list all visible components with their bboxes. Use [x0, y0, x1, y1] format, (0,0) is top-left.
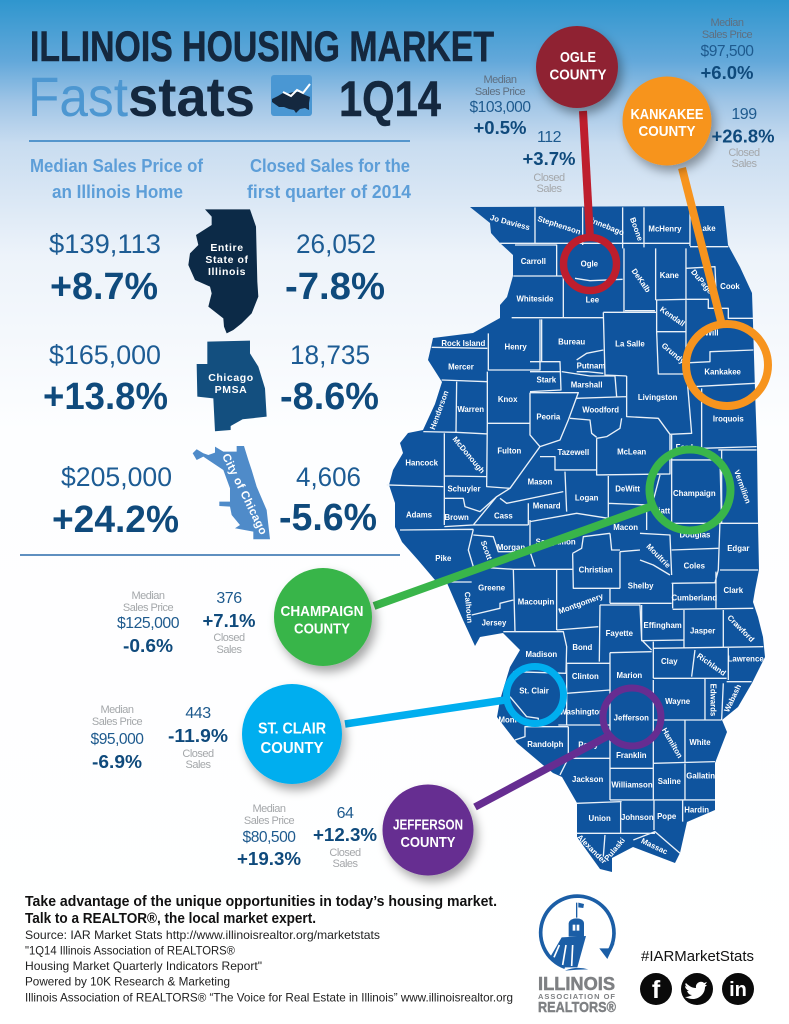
Jefferson price stats: $80,500 — [242, 829, 296, 846]
logo: Illinois Association of Realtors — [538, 896, 616, 1016]
county names north: Stephenson — [536, 214, 582, 237]
Kankakee price stats: Sales Price — [702, 29, 752, 41]
St. Clair price stats: -6.9% — [92, 751, 142, 772]
county names north: Menard — [533, 501, 561, 510]
county names north: Knox — [498, 395, 518, 404]
county names north: Henry — [505, 343, 527, 352]
Ogle price stats: +0.5% — [474, 117, 526, 138]
county names north: Grundy — [660, 341, 687, 366]
county names south: Jackson — [572, 775, 604, 784]
county names north: Schuyler — [447, 485, 481, 494]
county names north: Fulton — [497, 447, 521, 456]
county names south: Fayette — [606, 629, 634, 638]
Champaign price stats: Sales Price — [123, 602, 173, 614]
stats row: entire state: $139,113 — [49, 229, 161, 259]
stats row: Chicago PMSA — [43, 340, 379, 418]
county names south: Douglas — [680, 531, 711, 540]
county names south: Johnson — [621, 813, 654, 822]
sources: "1Q14 Illinois Association of REALTORS® — [25, 944, 235, 958]
Jefferson closed sales stats: 64 — [337, 805, 354, 822]
Champaign closed sales stats: +7.1% — [202, 610, 256, 631]
county names south: Moultrie — [644, 542, 673, 570]
Jefferson price stats — [237, 803, 301, 869]
callout: Kankakee County: KANKAKEE — [630, 106, 704, 123]
county names south: Crawford — [725, 613, 756, 644]
sources: Source: IAR Market Stats http://www.illinoisrealtor.org/marketstats — [25, 928, 380, 942]
Jefferson price stats: Sales Price — [244, 815, 294, 827]
county names south: Macoupin — [518, 598, 554, 607]
Champaign closed sales stats: 376 — [216, 590, 242, 607]
stats row: entire state: +8.7% — [50, 266, 158, 308]
St. Clair closed sales stats: -11.9% — [168, 725, 228, 746]
Faststats logo: Fast — [28, 65, 128, 128]
icon: LinkedIn — [722, 973, 754, 1005]
icon: Facebook: f — [652, 976, 661, 1004]
county names south: St. Clair — [519, 687, 549, 696]
stats row: City of Chicago: -5.6% — [279, 497, 377, 539]
St. Clair price stats: $95,000 — [90, 731, 144, 748]
call to action — [25, 894, 497, 927]
callout: Ogle County — [536, 26, 618, 290]
county names south: Clark — [724, 586, 744, 595]
icon: LinkedIn: in — [729, 979, 747, 1001]
county names north: Putnam — [577, 362, 605, 371]
state outline — [389, 206, 765, 872]
county names south: Pope — [657, 812, 677, 821]
county names south: Effingham — [643, 621, 682, 630]
Faststats logo: stats — [128, 65, 255, 128]
St. Clair price stats: Sales Price — [92, 716, 142, 728]
Kankakee price stats: $97,500 — [700, 43, 754, 60]
county names south — [435, 531, 764, 866]
county names north: McHenry — [648, 224, 682, 233]
county names north: McLean — [617, 447, 646, 456]
Kankakee closed sales stats: Sales — [731, 158, 758, 170]
callout: Champaign County — [274, 450, 730, 666]
county names north: Will — [705, 328, 719, 337]
county names north: Henderson — [428, 389, 451, 431]
Jefferson closed sales stats: Closed — [329, 847, 361, 859]
county names south: Union — [589, 814, 611, 823]
callout: Jefferson County — [382, 688, 661, 876]
county names north: Peoria — [536, 412, 561, 421]
county names north: Champaign — [673, 489, 716, 498]
county names north: DuPage — [689, 268, 715, 296]
Jefferson closed sales stats: Sales — [332, 858, 359, 870]
callout: Kankakee County — [622, 76, 768, 406]
heading: median sales price — [30, 156, 204, 202]
county names south: Randolph — [527, 740, 564, 749]
icon: Illinois silhouette — [188, 209, 258, 333]
county names south: Richland — [695, 651, 728, 678]
stats row: City of Chicago: +24.2% — [52, 499, 179, 541]
county names south: Edwards — [709, 684, 718, 717]
county names south: Williamson — [611, 780, 653, 789]
Ogle price stats: Median — [483, 74, 517, 86]
county names north: Lee — [586, 296, 600, 305]
county names south: Christian — [579, 566, 613, 575]
county names south: Morgan — [497, 543, 525, 552]
county borders south — [400, 520, 763, 857]
county names north: Boone — [628, 216, 645, 243]
county names north: Kendall — [658, 305, 687, 328]
county names north: Macon — [613, 523, 638, 532]
county names south: Clinton — [572, 672, 599, 681]
Champaign price stats: $125,000 — [117, 615, 180, 632]
St. Clair closed sales stats: Closed — [182, 748, 214, 760]
county names south: Calhoun — [463, 591, 474, 624]
county names north: Rock Island — [441, 339, 486, 348]
icon: Illinois silhouette: State of — [205, 254, 249, 266]
county names north: Mercer — [448, 362, 474, 371]
Champaign price stats: Median — [131, 590, 165, 602]
St. Clair price stats: Median — [100, 704, 134, 716]
county names south: Montgomery — [557, 591, 605, 616]
Faststats logo — [28, 65, 312, 128]
county names north: Kankakee — [704, 367, 742, 376]
county names north: Kane — [660, 271, 680, 280]
stats row: Chicago PMSA: +13.8% — [43, 376, 168, 418]
call to action: Take advantage of the unique opportunities in today’s housing market. — [25, 894, 497, 910]
icon: City of Chicago silhouette — [193, 446, 270, 539]
sources — [25, 928, 513, 1004]
icon: Facebook — [640, 973, 672, 1005]
county names south: Bond — [572, 643, 593, 652]
county names south: Cumberland — [671, 593, 717, 602]
county names south: White — [689, 738, 711, 747]
title: ILLINOIS HOUSING MARKET — [30, 23, 494, 71]
county names south: Alexander — [575, 833, 608, 866]
stats row: Chicago PMSA: 18,735 — [290, 340, 370, 370]
county names north: McDonough — [451, 435, 487, 475]
stats row: entire state — [49, 229, 385, 308]
stats row: City of Chicago — [52, 462, 377, 541]
county names north: Cook — [720, 282, 740, 291]
county names south: Washington — [559, 708, 604, 717]
Champaign closed sales stats — [202, 590, 256, 656]
callout: Ogle County: OGLE — [560, 49, 596, 66]
heading: median sales price: Median Sales Price of — [30, 156, 204, 176]
sources: Illinois Association of REALTORS® “The Voice for Real Estate in Illinois” www.illinoisrealtor.org — [25, 990, 513, 1004]
Champaign price stats: -0.6% — [123, 635, 173, 656]
county names south: Wabash — [722, 683, 743, 714]
St. Clair price stats — [90, 704, 144, 772]
stats row: City of Chicago: 4,606 — [296, 462, 361, 492]
county names north: Piatt — [653, 507, 671, 516]
county names south: Scott — [479, 539, 494, 561]
county names north: Ford — [676, 443, 693, 452]
county names south: Jersey — [482, 618, 507, 627]
county names north: Winnebago — [583, 213, 626, 237]
logo: Illinois Association of Realtors: ASSOCIATION OF — [538, 992, 615, 1001]
map of Illinois counties — [387, 206, 765, 872]
icon: Chicago PMSA silhouette: PMSA — [215, 384, 247, 396]
county names south: Clay — [661, 657, 678, 666]
Kankakee closed sales stats: 199 — [731, 106, 757, 123]
stats row: Chicago PMSA: $165,000 — [49, 340, 161, 370]
county names north — [405, 213, 753, 532]
county names north: Lake — [698, 224, 716, 233]
county names south: Sangamon — [536, 537, 576, 546]
heading: median sales price: an Illinois Home — [52, 182, 183, 202]
county names north: Stark — [537, 375, 557, 384]
county names north: DeKalb — [630, 267, 653, 294]
icon: City of Chicago silhouette: City of Chicago — [219, 452, 269, 537]
stats row: Chicago PMSA: -8.6% — [280, 376, 379, 418]
county names north: Adams — [406, 510, 433, 519]
Champaign price stats — [117, 590, 180, 656]
period label 1Q14: 1Q14 — [339, 71, 441, 127]
county names north: Vermilion — [732, 469, 753, 505]
county names south: Coles — [684, 561, 706, 570]
callout: Ogle County: COUNTY — [550, 66, 606, 84]
county names north: Bureau — [558, 338, 585, 347]
county names north: Ogle — [581, 260, 599, 269]
county names south: Massac — [640, 836, 670, 857]
county names south: Saline — [658, 777, 681, 786]
call to action: Talk to a REALTOR®, the local market expert. — [25, 911, 316, 927]
stats row: entire state: 26,052 — [296, 229, 376, 259]
icon: Chicago PMSA silhouette: Chicago — [208, 372, 254, 384]
Jefferson closed sales stats: +12.3% — [313, 824, 377, 845]
heading: closed sales: Closed Sales for the — [250, 156, 410, 176]
county names north: Brown — [444, 513, 469, 522]
callout: St. Clair County: COUNTY — [260, 740, 324, 757]
Kankakee price stats: Median — [710, 17, 744, 29]
county names south: Monroe — [499, 716, 527, 725]
Kankakee price stats — [700, 17, 754, 83]
icon: Twitter — [681, 973, 713, 1005]
county names north: Whiteside — [516, 295, 554, 304]
county names north: Carroll — [521, 257, 546, 266]
county names south: Marion — [616, 671, 642, 680]
logo: Illinois Association of Realtors: ILLINOIS — [538, 974, 615, 994]
county names north: DeWitt — [615, 485, 640, 494]
Kankakee price stats: +6.0% — [700, 62, 754, 83]
logo: Illinois Association of Realtors: REALTORS® — [538, 999, 616, 1016]
county names north: Cass — [494, 511, 513, 520]
heading: closed sales: first quarter of 2014 — [247, 182, 411, 202]
Ogle closed sales stats — [522, 129, 576, 195]
icon: Illinois silhouette: Illinois — [208, 266, 246, 278]
county names south: Wayne — [665, 697, 691, 706]
county names north: Warren — [457, 405, 484, 414]
St. Clair closed sales stats: Sales — [185, 759, 212, 771]
county names south: Madison — [525, 650, 557, 659]
county names north: Livingston — [638, 393, 678, 402]
county names south: Franklin — [616, 751, 647, 760]
Kankakee closed sales stats — [712, 106, 774, 170]
Champaign closed sales stats: Sales — [216, 644, 243, 656]
Kankakee closed sales stats: +26.8% — [712, 126, 774, 146]
county names north: Logan — [575, 493, 599, 502]
county names north: Marshall — [571, 381, 603, 390]
callout: Champaign County: CHAMPAIGN — [280, 603, 364, 620]
county borders north — [387, 207, 758, 530]
Ogle price stats: $103,000 — [470, 99, 531, 116]
St. Clair closed sales stats: 443 — [185, 705, 211, 722]
St. Clair closed sales stats — [168, 705, 228, 771]
county names south: Hardin — [684, 805, 709, 814]
county names south: Jefferson — [614, 713, 649, 722]
Jefferson closed sales stats — [313, 805, 377, 870]
callout: St. Clair County: ST. CLAIR — [258, 720, 326, 738]
county names north: Mason — [528, 477, 553, 486]
callout: Jefferson County: JEFFERSON — [393, 816, 463, 834]
Champaign closed sales stats: Closed — [213, 632, 245, 644]
county names south: Hamilton — [660, 726, 685, 760]
county names north: Woodford — [582, 406, 619, 415]
callout: St. Clair County — [242, 666, 564, 784]
county names south: Gallatin — [686, 771, 715, 780]
county names south: Lawrence — [728, 654, 764, 663]
Ogle price stats: Sales Price — [475, 86, 525, 98]
county names south: Perry — [578, 741, 599, 750]
callout: Jefferson County: COUNTY — [400, 834, 456, 851]
sources: Powered by 10K Research & Marketing — [25, 974, 230, 988]
sources: Housing Market Quarterly Indicators Report" — [25, 959, 262, 973]
stats row: entire state: -7.8% — [285, 266, 385, 308]
Ogle closed sales stats: Closed — [533, 172, 565, 184]
county names south: Shelby — [628, 581, 654, 590]
Ogle closed sales stats: +3.7% — [522, 148, 576, 169]
county names north: Tazewell — [558, 448, 589, 457]
county names north: La Salle — [615, 340, 645, 349]
county names south: Pulaski — [602, 836, 627, 863]
callout: Kankakee County: COUNTY — [638, 123, 696, 140]
county names south: Greene — [478, 584, 506, 593]
Jefferson price stats: +19.3% — [237, 848, 301, 869]
county names north: Jo Daviess — [489, 213, 532, 232]
Kankakee closed sales stats: Closed — [728, 147, 760, 159]
icon: Chicago PMSA silhouette — [197, 341, 267, 431]
county names south: Edgar — [727, 544, 749, 553]
county names south: Pike — [435, 554, 452, 563]
hashtag: #IARMarketStats — [641, 948, 754, 965]
icon: Illinois silhouette: Entire — [210, 242, 244, 254]
county names north: Iroquois — [713, 415, 744, 424]
county names south: Jasper — [690, 626, 715, 635]
Ogle closed sales stats: 112 — [537, 129, 562, 146]
county names north: Hancock — [405, 458, 439, 467]
Ogle price stats — [470, 74, 531, 138]
stats row: City of Chicago: $205,000 — [61, 462, 172, 492]
heading: closed sales — [247, 156, 411, 202]
Jefferson price stats: Median — [252, 803, 286, 815]
callout: Champaign County: COUNTY — [294, 620, 350, 638]
Ogle closed sales stats: Sales — [536, 183, 563, 195]
